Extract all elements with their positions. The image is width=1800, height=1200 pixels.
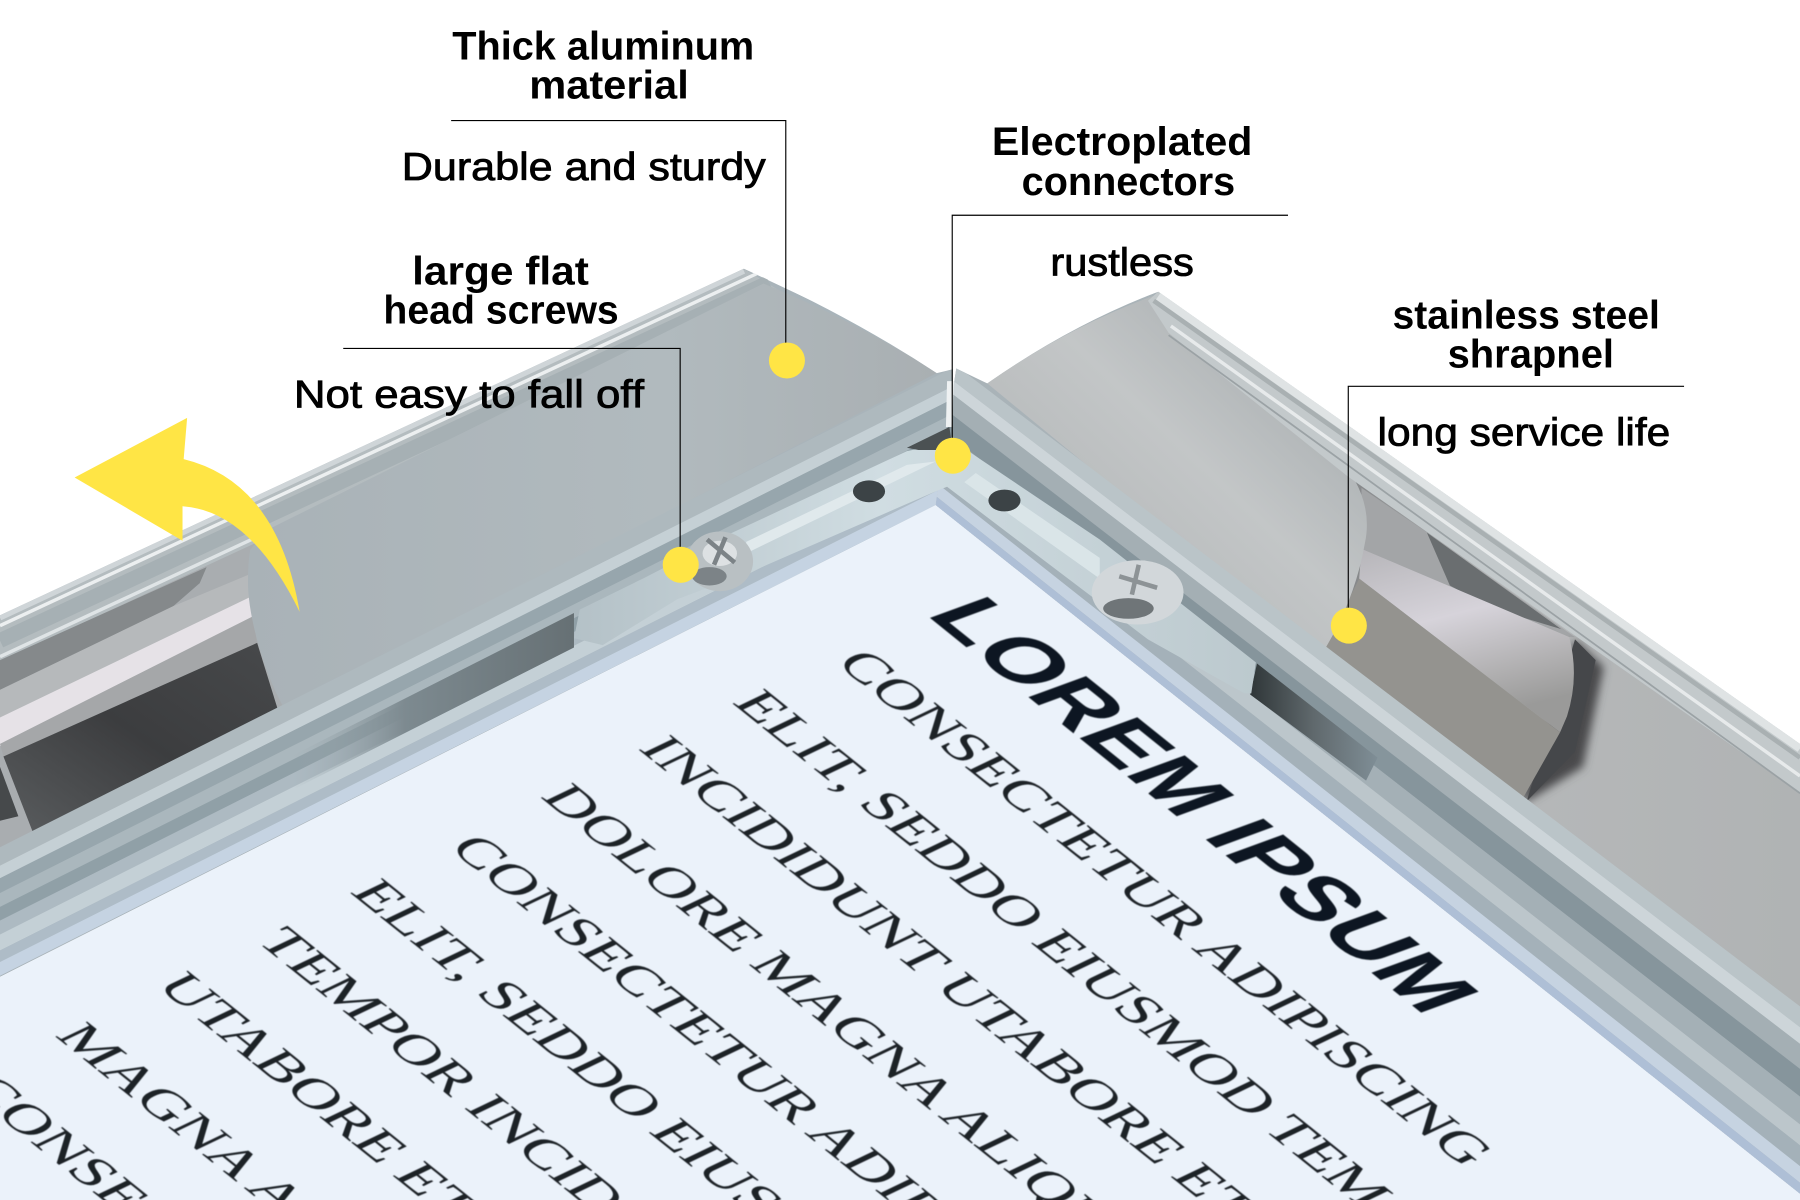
corner notch and seam xyxy=(907,381,954,450)
flap: aluminum cover xyxy=(248,284,937,709)
lower rails xyxy=(0,368,953,976)
left frame bar xyxy=(0,269,953,977)
callout: electroplated connectors xyxy=(935,119,1288,474)
callout: large flat head screws xyxy=(294,249,699,583)
right screw xyxy=(1092,560,1184,624)
steel shrapnel plate xyxy=(1359,549,1574,732)
poster sheet: ELIT, SEDDO EIUSMOD TEM xyxy=(720,682,1407,1200)
connector holes xyxy=(853,480,1021,511)
callout: large flat head screws: large flat xyxy=(412,249,589,294)
channel xyxy=(1350,482,1747,966)
right frame bar xyxy=(936,292,1800,1194)
callout: stainless steel shrapnel: stainless steel xyxy=(1392,292,1660,337)
flap: right cover xyxy=(987,296,1367,657)
right slot xyxy=(1250,664,1378,781)
poster sheet: CONSECTETUR ADIPISCING xyxy=(824,642,1508,1173)
callout: electroplated connectors: Electroplated xyxy=(992,119,1252,164)
poster sheet xyxy=(0,505,1800,1200)
inner channel and dark plate xyxy=(0,544,282,847)
callout: stainless steel shrapnel xyxy=(1331,292,1684,644)
left slot xyxy=(312,613,574,779)
arrow: lift the flap xyxy=(75,418,300,612)
callout: electroplated connectors: rustless xyxy=(1050,242,1194,285)
corner connector plate xyxy=(574,445,1256,693)
callout: stainless steel shrapnel: shrapnel xyxy=(1448,331,1614,376)
callout: thick aluminum material: material xyxy=(529,63,689,108)
photo: poster frame corner xyxy=(0,269,1800,1200)
callout: electroplated connectors: connectors xyxy=(1022,159,1235,204)
right lower rails xyxy=(936,350,1800,1194)
callout: thick aluminum material: Durable and sturdy xyxy=(402,146,766,189)
callout: large flat head screws: head screws xyxy=(383,288,619,333)
callout: thick aluminum material xyxy=(402,24,805,378)
callout: thick aluminum material: Thick aluminum xyxy=(452,24,754,69)
top rail xyxy=(1148,292,1800,793)
callout: large flat head screws: Not easy to fall off xyxy=(294,374,644,417)
left screw xyxy=(686,532,753,591)
callout: stainless steel shrapnel: long service life xyxy=(1378,411,1670,454)
poster sheet: LOREM IPSUM xyxy=(907,587,1501,1023)
